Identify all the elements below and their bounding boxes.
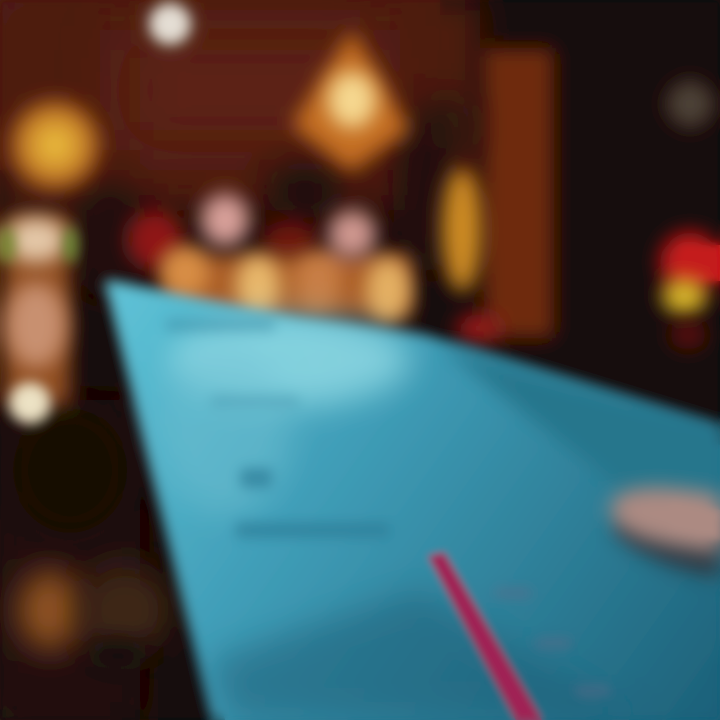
red ribbon on menu [428,552,611,720]
yellow lamp [9,99,101,191]
menu paper [105,280,720,720]
left column of lights [0,215,77,423]
menu lower shadow [210,590,640,720]
blurred menu text lines [165,318,390,538]
red and yellow light at right [660,232,720,349]
menu bright highlight [170,314,410,406]
row of warm lights [161,194,410,322]
dark silhouettes [10,95,472,535]
red glow behind table [127,210,500,342]
brown pillar [484,48,554,338]
ceiling light: white [147,1,193,47]
finger [610,488,720,580]
menu right page [440,345,720,590]
amber glass on the pillar [442,168,482,292]
bottom left table items [18,565,170,671]
warm band of lights [165,255,410,315]
distant grey light [666,80,714,128]
orange hanging lamp [292,30,410,172]
